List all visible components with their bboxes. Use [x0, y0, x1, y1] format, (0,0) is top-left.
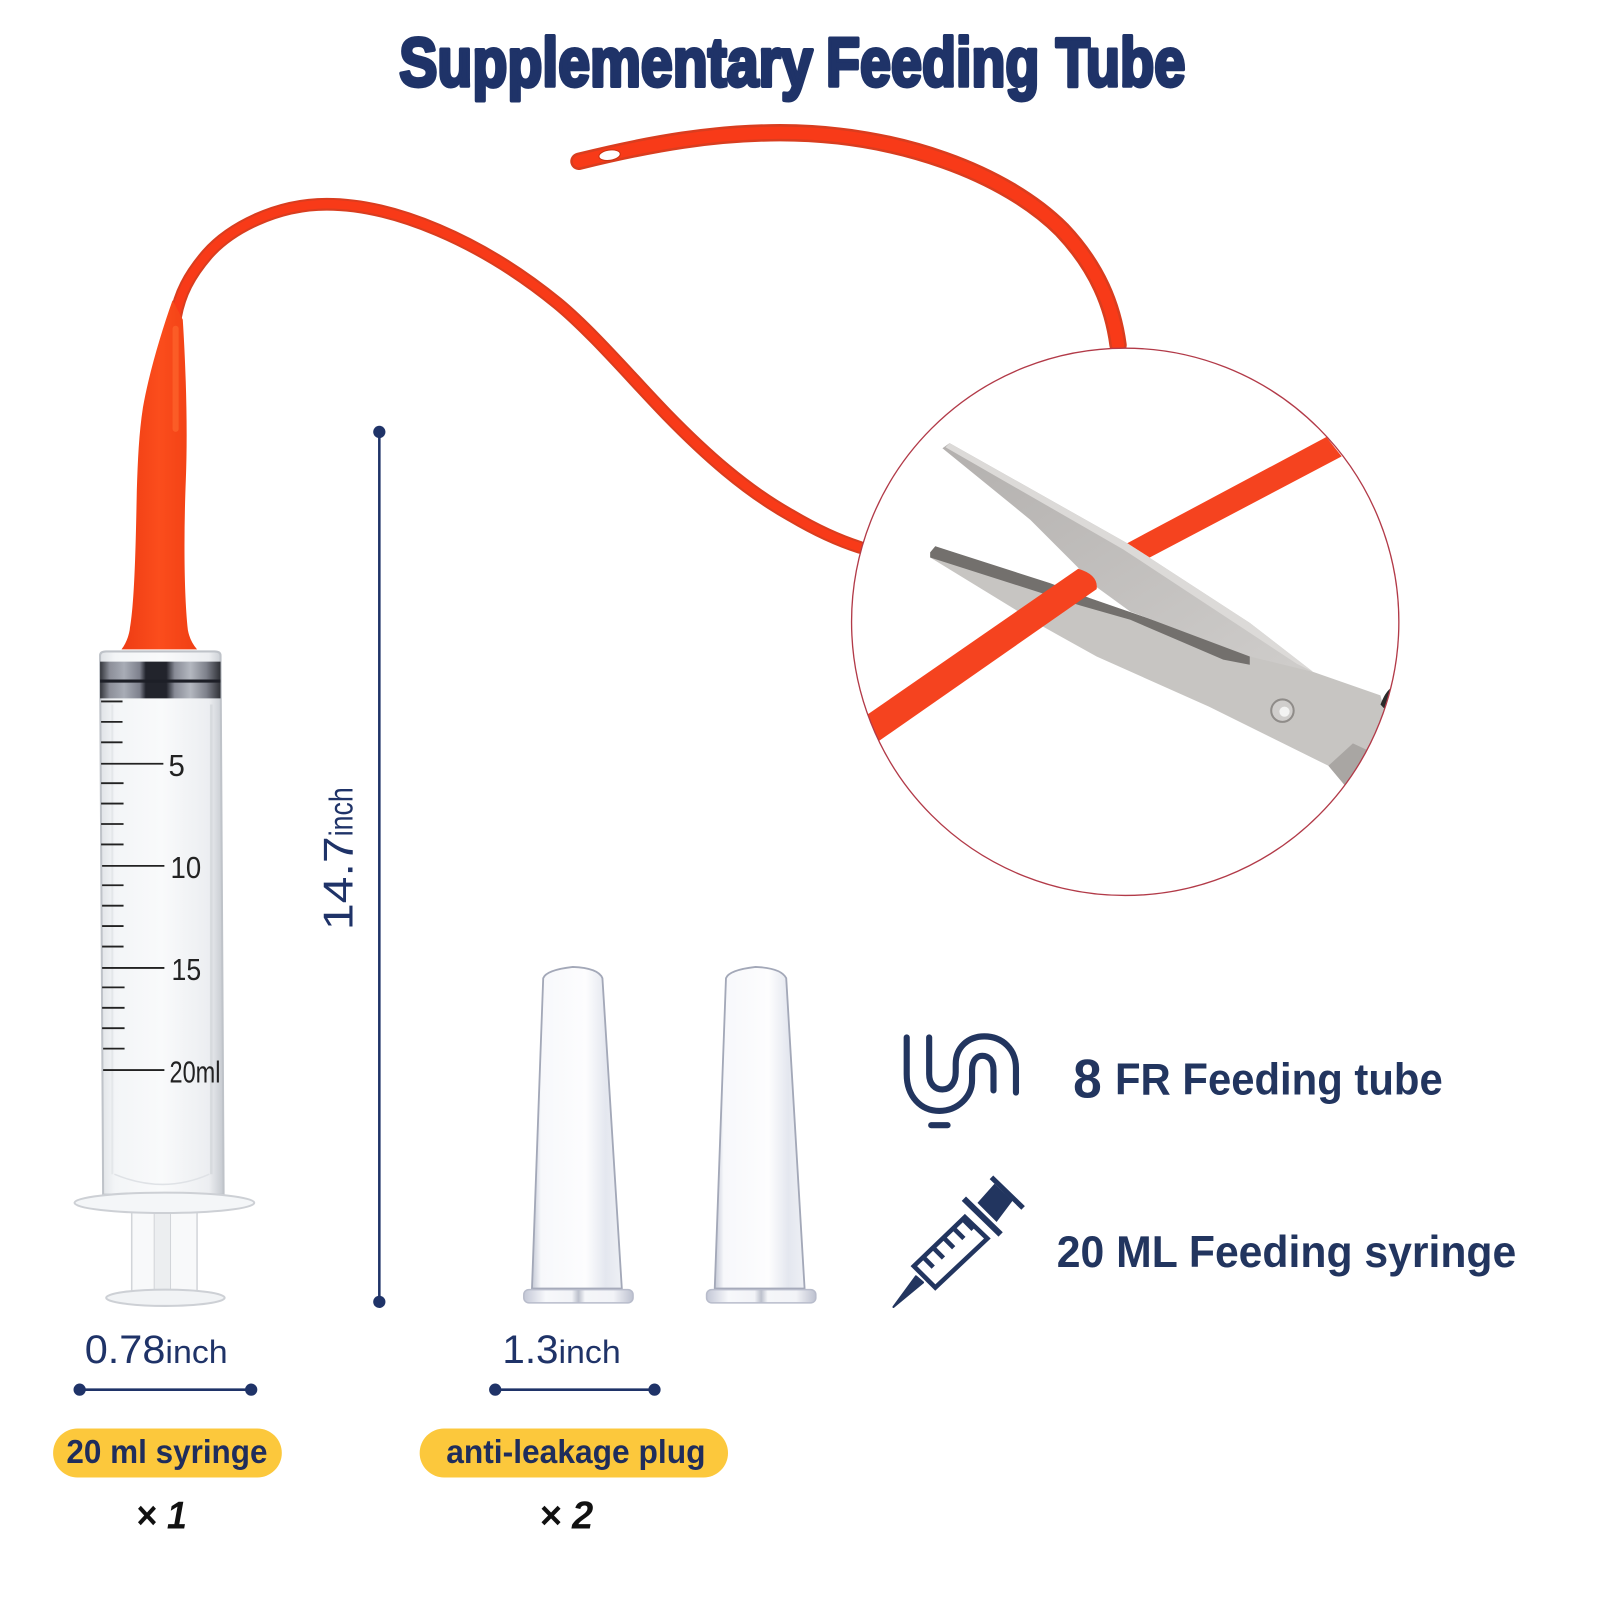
- plug width label: [502, 1328, 621, 1372]
- feeding tube tip section: [579, 133, 1118, 345]
- height label: [314, 787, 361, 930]
- quantity: syringe: × 1: [136, 1495, 187, 1538]
- title: Feeding: [826, 25, 1039, 101]
- icon: tube: [907, 1036, 1016, 1125]
- plunger base: [106, 1290, 225, 1306]
- title: Tube: [1056, 25, 1185, 101]
- height label: inch: [323, 787, 360, 836]
- label pill: 20 ml syringe: 20 ml syringe: [66, 1434, 268, 1471]
- plug width line: [489, 1384, 661, 1396]
- quantity: plug: × 2: [539, 1495, 594, 1538]
- height dimension line: [373, 426, 385, 1308]
- syringe spec: 20 ML Feeding syringe: [1057, 1226, 1516, 1277]
- syringe width label: 0.78: [85, 1328, 165, 1372]
- title: [399, 25, 1185, 101]
- plug one: [524, 967, 633, 1303]
- magnified circle: cutting the tube: [852, 348, 1399, 895]
- feeding tube spec: 8: [1073, 1048, 1102, 1110]
- syringe volume labels: 10: [171, 851, 201, 885]
- syringe volume labels: 20ml: [169, 1055, 221, 1089]
- syringe plunger: [132, 1210, 197, 1293]
- syringe flange: [75, 1193, 254, 1213]
- syringe barrel: [100, 651, 224, 1195]
- syringe volume labels: [168, 749, 221, 1089]
- syringe: [75, 651, 254, 1306]
- lower scissor blade and handle: [930, 546, 1391, 791]
- syringe volume labels: 15: [172, 953, 201, 987]
- syringe width line: [74, 1384, 257, 1396]
- height label: 14.7: [314, 836, 361, 930]
- feeding tube funnel section: [122, 204, 860, 649]
- plug width label: 1.3: [502, 1328, 559, 1372]
- label pill: anti-leakage plug: anti-leakage plug: [446, 1434, 706, 1471]
- icon: syringe: [893, 1177, 1023, 1307]
- lower tube piece: [863, 569, 1097, 742]
- title: Supplementary: [399, 25, 813, 101]
- rivet: [1271, 699, 1294, 722]
- upper tube piece: [1127, 437, 1342, 557]
- feeding tube spec: FR Feeding tube: [1115, 1054, 1443, 1105]
- feeding tube spec: [1073, 1048, 1443, 1110]
- syringe volume labels: 5: [168, 749, 185, 783]
- label pill: anti-leakage plug: [420, 1428, 728, 1477]
- syringe width label: inch: [165, 1333, 228, 1370]
- plug width label: inch: [559, 1333, 621, 1370]
- scissor handle tip: [1380, 688, 1390, 708]
- syringe width label: [85, 1328, 228, 1372]
- upper scissor blade: [942, 443, 1313, 672]
- plug two: [707, 967, 816, 1303]
- syringe tick marks: [101, 701, 164, 1070]
